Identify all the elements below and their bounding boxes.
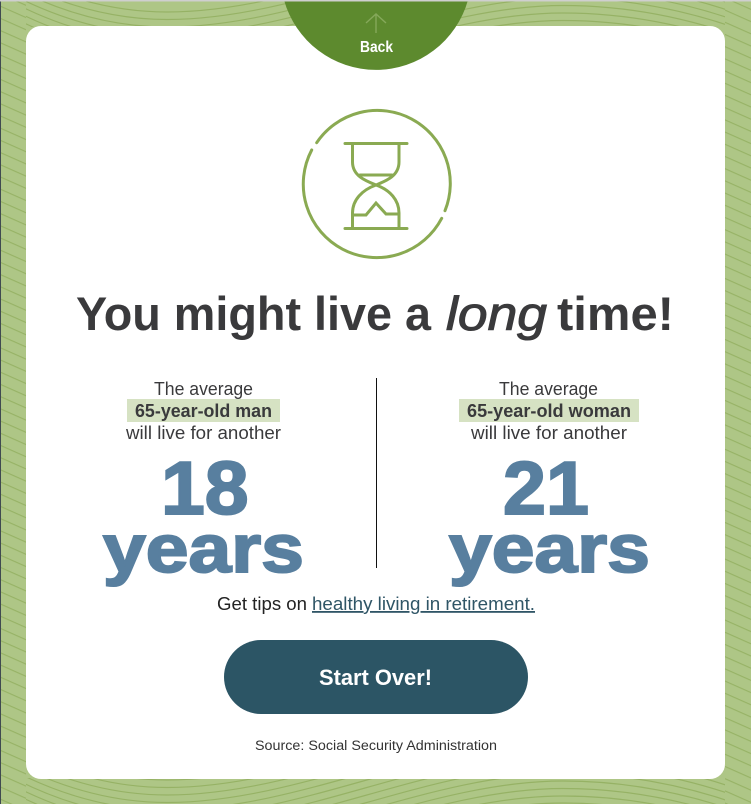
tips text with link: healthy living in retirement. bbox=[312, 594, 535, 614]
tips text with link: Get tips on bbox=[217, 594, 307, 614]
men continuation text: will live for another bbox=[125, 423, 281, 443]
men statistic: years bbox=[103, 511, 304, 587]
start over button bbox=[224, 640, 528, 714]
men intro text: The average bbox=[154, 379, 253, 399]
icon: hourglass in broken circle bbox=[303, 110, 450, 258]
icon: up arrow bbox=[366, 14, 386, 33]
title: You might live a bbox=[76, 287, 432, 340]
women statistic: 21 bbox=[503, 447, 589, 531]
women intro text: The average bbox=[499, 379, 598, 399]
back label: Back bbox=[360, 39, 393, 56]
center divider bbox=[376, 378, 377, 568]
men statistic: 18 bbox=[161, 447, 249, 531]
title bbox=[76, 287, 674, 340]
women statistic: years bbox=[449, 511, 650, 587]
start over button: Start Over! bbox=[319, 665, 432, 690]
title: long bbox=[446, 287, 547, 340]
panel: women bbox=[449, 379, 650, 587]
tips text with link bbox=[217, 594, 535, 614]
women highlight: 65-year-old woman bbox=[467, 401, 631, 421]
panel: men bbox=[103, 379, 304, 587]
title: time! bbox=[557, 287, 674, 340]
women statistic bbox=[449, 447, 650, 587]
source note: Source: Social Security Administration bbox=[255, 738, 497, 753]
men statistic bbox=[103, 447, 304, 587]
women continuation text: will live for another bbox=[470, 423, 627, 443]
men highlight: 65-year-old man bbox=[135, 401, 272, 421]
back button bbox=[284, 0, 468, 70]
